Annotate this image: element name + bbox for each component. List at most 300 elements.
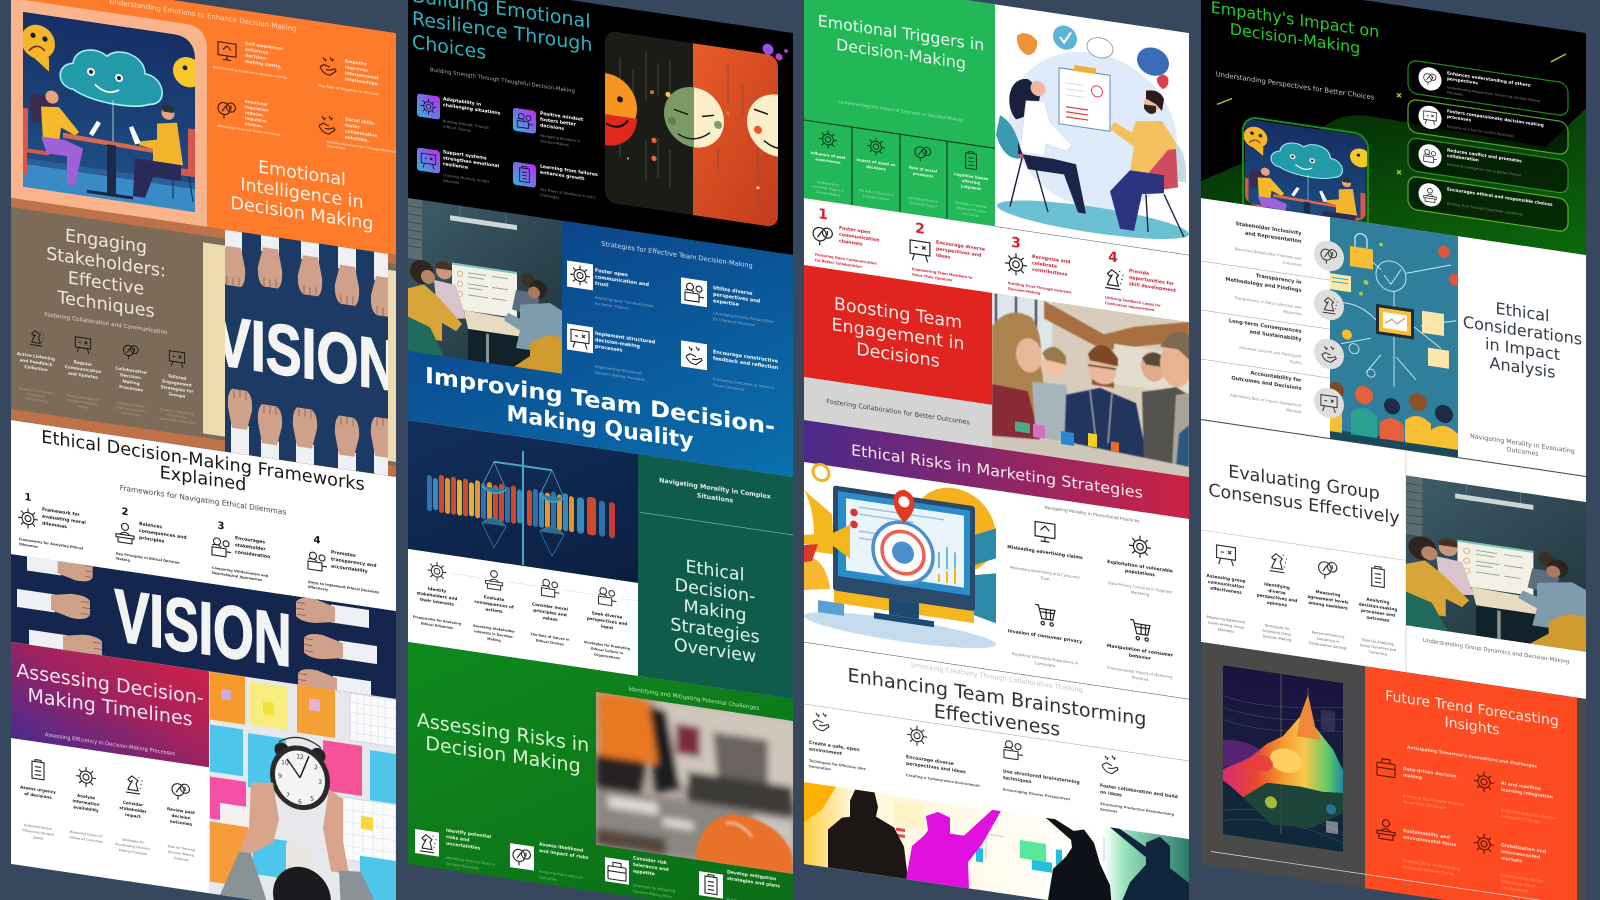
item 4 [1359,564,1397,658]
title: Emotional Triggers in [818,11,984,55]
subtitle: Unlocking Creativity Through Collaborative Thinking [911,661,1083,694]
subtitle: Building Strength Through Thoughtful Decision-Making [430,67,575,95]
item 1: Trust [1040,576,1050,581]
central man with glasses [1088,348,1116,388]
item 1: Influencing Decision [22,828,54,837]
item 1: uncertainties [446,841,481,852]
item 4: Platforms for [167,413,187,420]
subtitle: Fostering Collaboration for Better Outcomes [826,397,970,427]
title: Ethical [1496,299,1549,326]
row 4: Methods [1286,408,1302,414]
row 1: Stakeholder Inclusivity [1236,221,1302,237]
item 2: Voice Their Opinions [912,273,952,282]
item 4: Steps to Implement Ethical Decisions [308,580,379,594]
item 2: Utilize diverse [713,285,753,297]
gradient title band [804,420,1189,519]
card 2 [1408,99,1568,155]
item 4: 4 [314,535,320,547]
item 1: Influence of past [810,151,846,160]
subtitle: Situations [697,492,733,505]
slide: Empathy's Impact on Decision-Making [1201,0,1586,277]
gradient title panel [11,642,209,767]
slide: Boosting Team Engagement in Decisions [804,198,1196,478]
item 3: pressures [913,172,934,179]
item 3: Recognize and [1032,254,1071,265]
subtitle: Navigating Morality in Complex [659,477,771,501]
title: Improving Team Decision- [425,363,775,440]
subtitle: Understanding Group Dynamics and Decision-Making [1423,638,1569,665]
item 3: Support systems [443,149,487,162]
item 4: Decision-Making [168,850,194,858]
item 3: Encourages [235,535,265,546]
item: emotional regulation: impulsive [245,115,267,124]
item 1: Members [1218,628,1234,634]
card 1: Processes [1447,90,1463,97]
item 2: Techniques for [1263,623,1290,631]
item 2 [1107,531,1173,601]
column 1 of slides [11,0,398,900]
item 3: principles and [533,608,567,617]
item 4: Creating Collaborative [160,407,194,416]
item 2: Analyzing Risk Impact on [539,869,583,880]
slide: Building Emotional Resilience [408,0,809,257]
item 4: Continuous Improvement [1105,301,1155,312]
item 1 [417,92,501,137]
item: emotional regulation: Managing Stress for Better Decisions [218,124,281,137]
photo: clock and sticky notes: 12 [296,753,304,761]
framed illustration [1243,116,1368,235]
item 2: opinions [1267,600,1288,608]
item 3: Measuring [1316,589,1340,598]
illustration: people under a smiling cloud [21,11,203,213]
photo: blurred workshop with orange vest [596,690,798,875]
slide: Enhancing Team Brainstorming Effectiveness [804,642,1189,900]
item 4: Future Decisions [713,383,744,392]
row 3: Informed Consent and Participant [1239,346,1302,359]
title: Decision Making [231,194,373,235]
item 2: Balances [139,521,162,530]
title: Insights [1444,715,1500,739]
item 1: challenging situations [443,102,501,117]
title: Making Quality [506,401,694,454]
item 3: Sustainability and [1403,828,1450,841]
item 4: Environmental Impact of Marketing [1107,666,1173,680]
item 1 [1007,517,1083,586]
title: Strategies [670,615,760,648]
item 3: Consensus in [1316,637,1340,644]
item 4: perspectives and [587,615,627,626]
item 1: Adaptability in [443,96,481,108]
item 4 [160,349,195,425]
item 2 [856,135,896,203]
item 2: Predictive Analytics: Tools for [1501,807,1557,821]
item 2 [65,335,101,412]
slide: Future Trend Forecasting Insights [1201,642,1586,900]
item 2 [906,724,980,788]
item 3 [908,145,938,209]
item 2: Leveraging Diverse Perspectives [713,311,773,324]
item 1: stakeholders and [417,590,457,601]
item 3: Consider risk [633,855,668,866]
item: social skills: Building Relationships Through Emotional [327,140,398,154]
photo: people at a colorful whiteboard [804,778,1189,900]
item 4: Ethical Culture in [591,647,624,655]
item 1: making [1403,772,1422,781]
item 2: Positive mindset [540,111,584,123]
item 2: availability [73,804,99,813]
item 1: Techniques for Effective Idea [809,759,866,771]
item 3: among members [1308,600,1348,611]
item 2: Diverse Stakeholder [68,398,99,407]
item 2: Encourage diverse [906,754,954,767]
item 1 [1207,543,1246,636]
item 2: and Updates [68,370,98,380]
item 1 [415,823,495,873]
item 1 [413,558,462,631]
row 3 [1229,318,1344,372]
item 3 [1377,819,1461,877]
item 3: Making Processes [119,848,147,856]
item 4: Promotes [331,549,356,559]
item 3: The Role of Values in [531,632,570,642]
title: Choices [412,30,486,64]
item 4: Evaluating Outcomes to Improve [713,377,775,390]
item 3: agreement levels [1307,594,1349,605]
item 2: perspectives and [936,246,981,259]
item 4: Emotional Influence [956,206,986,214]
item 1: their interests [420,597,454,607]
item 4: skill development [1129,281,1177,294]
item: social skills: Social skills [345,116,374,127]
title: Boosting Team [834,295,962,333]
item: social skills: solutions. [345,134,370,144]
item 1: 1 [818,206,828,224]
item 3: Invasion of consumer privacy [1008,628,1082,645]
item 3: appetite [633,868,655,878]
title: Ethical [685,557,745,586]
card 3: Reduces conflict and promotes [1447,147,1522,165]
item 1: Frameworks for Analyzing Ethical [19,537,83,551]
row 3: Long-term Consequences [1229,318,1302,335]
item 2 [70,765,103,844]
photo: clock and sticky notes: 6 [298,799,302,806]
item 2: and impact of risks [539,848,589,861]
item: empathy [318,54,379,97]
photo: VISION banner with hands [11,549,396,706]
item: self-awareness: decision- [245,53,267,62]
item 4: The Power of Resilience in Life's [539,187,596,200]
item 1: Foster open [595,268,628,279]
item: self-awareness: Understanding Emotions in Decision-Making [213,65,287,80]
item 1: Levels Among Group [1208,621,1245,630]
item 1 [20,757,56,843]
item 4: Tools for Analyzing [1361,638,1394,647]
item: self-awareness: enhances [245,47,269,56]
item 4: decision [171,813,191,821]
row 4: Accountability for [1250,370,1302,384]
item 3: Identifying Personal [908,195,938,204]
item 1: communication [1208,579,1244,589]
item 1: Identifying Potential Risks in [446,856,495,867]
title: Making [684,597,746,626]
silhouette: woman [1048,824,1112,900]
man [1144,94,1160,113]
item 1: Create a safe, open [809,740,859,753]
item 1: evaluating moral [42,514,86,526]
title: Considerations [1463,312,1582,349]
item 4: enhances growth [540,170,585,182]
item 4 [307,536,379,594]
item 2: populations [1125,568,1155,578]
item 1: Collection [24,364,48,372]
item 3: stakeholder [119,805,148,814]
photo: clock and sticky notes: 5 [310,795,314,803]
item 4 [1105,249,1177,316]
title: Decisions [856,340,940,372]
title: Ethical Risks in Marketing Strategies [851,441,1143,502]
item 1: Fostering Open Communication [595,296,654,308]
item 3: Making [122,379,140,386]
item 3: Building Trust Through Inclusive [1008,281,1072,295]
item 3: tolerance and [633,862,669,873]
photo: clock and sticky notes: 2 [314,764,318,771]
photo: clock and sticky notes: 3 [318,778,322,786]
slide: Improving Team Decision-Making Quality [404,197,793,477]
item 3: Ethical Choices [536,638,564,647]
item: emotional regulation: reduces [245,110,263,118]
item 4: Analyzing [1366,597,1390,605]
item 3 [1005,234,1072,300]
item 1: Transparent [26,392,46,399]
item 3 [567,324,656,384]
item 1: Misleading Advertising and Consumer [1010,566,1080,580]
item 4 [1107,616,1174,686]
row 2 [1225,269,1344,323]
item 4: Review past [167,806,195,815]
column 4 of slides [1201,0,1586,900]
item 1: Framework for [42,507,80,518]
slide: Ethical Decision-Making Strategies Overview [408,420,793,699]
row 1: Balancing Stakeholder Interests and [1235,247,1302,261]
item 2 [910,220,985,287]
subtitle: Fostering Collaboration and Communication [44,312,168,336]
subtitle: Understanding the Impact of Emotions on Decision-Making [839,99,963,123]
item 1: Misleading advertising claims [1007,544,1083,561]
item 4: Challenges [540,193,559,200]
item 4: Strategies for [161,384,194,394]
item 1: Building Strength Through [443,119,489,130]
item 4: Engagement [162,378,192,388]
item 2 [510,837,589,887]
item 4: interconnected [1501,849,1540,861]
item 2: decisions [866,165,887,172]
item: empathy: improves [345,64,368,74]
item 1: Measuring Agreement [1207,615,1246,625]
item 1: Generation [809,764,831,772]
item 3: Consider [123,800,144,808]
subtitle: Assessing Efficiency in Decision-Making Processes [45,732,175,757]
item 2: information [72,798,100,807]
item 4: strategies and plans [727,876,780,890]
item 3: resilience [443,161,468,171]
item 1: Emerging Technologies Shaping [1403,793,1464,807]
item: empathy: relationships. [345,76,379,87]
row 2: Transparency in [1256,273,1302,286]
slide: Ethical Risks in Marketing Strategies [804,420,1189,699]
title: Emotional [258,158,346,191]
illustration: monitor with target [804,462,996,655]
card 2: processes [1447,114,1472,124]
item 1 [1377,758,1464,813]
row 4: Outcomes and Decisions [1231,376,1302,392]
item 1: for Better Choices [595,302,628,311]
illustration: people under cloud (small) [1244,118,1371,246]
item 1: of decisions [24,791,52,800]
item: self-awareness: making clarity. [245,59,282,70]
item 3: Decision-Making Processes [595,371,645,382]
item 2: Everyday Choices [863,194,890,202]
item: emotional regulation: choices. [245,121,264,129]
slide: Assessing Risks in Decision Making [408,642,798,900]
item: social skills: collaborative [345,128,377,139]
row 3: and Sustainability [1249,329,1302,343]
item 4 [699,865,780,900]
illustration: scale of justice and people [408,420,638,583]
item 1: Foster open [839,225,871,236]
item 4: Tools for Tracking [166,844,195,852]
illustration: network over audience [1328,217,1461,458]
item 4: behavior [1129,653,1152,662]
title: in Impact [1485,334,1560,364]
item 2: Empowering Team Members to [912,267,973,280]
row 2: Methodology and Findings [1225,277,1302,294]
card 4: Building Trust Through Empathetic Leadership [1447,201,1523,217]
item 2: principles [139,535,165,545]
item 2: Regular [74,359,93,367]
item 2: Assessing Group [1263,629,1292,637]
item 2: Marketing [1131,590,1150,597]
item 2: Making [116,557,130,563]
item 2: Navigating Emotions in [540,134,580,144]
silhouette: magenta person [906,795,1002,893]
item 2 [513,107,584,150]
item 4: Provide [1129,268,1149,277]
item 1: Active Listening [17,351,55,362]
title: Consensus Effectively [1208,481,1400,529]
item 4: Cognitive biases [954,172,989,181]
item 3: decision-making [595,337,641,350]
item 2: Identifying [1264,581,1290,590]
decorative dashes and crosses [1217,2,1566,199]
card 1: Understanding Perspectives: Enhancing Decision-Making [1447,85,1540,103]
item 4: Structuring Productive Brainstorming [1100,802,1175,817]
item 1: Fostering Open Communication [815,253,877,266]
column 2 of slides [404,0,809,900]
item 1: Building Trust Through [19,386,53,395]
photo: team around a table [992,293,1196,478]
item 4: Utilizing Feedback Loops for [1105,296,1161,308]
item 4 [513,160,598,206]
item 1: Difficult Choices [443,125,471,133]
item 1: Identify [428,586,446,594]
item 4: Timelines [172,856,189,862]
item 4: Stakeholder Interaction [160,416,195,425]
item 4: transparency and [331,556,377,569]
item 3: consideration [235,549,270,560]
item: empathy: The Role of Empathy in Choices [318,83,378,96]
title: Decision-Making [836,35,966,73]
item 3: Emotional Triggers [909,201,937,209]
woman with long hair [992,309,1044,434]
item 3: Encouraging Diverse Perspectives [1003,787,1070,801]
item 3: stakeholder [235,542,266,553]
red title panel [804,265,992,405]
item 3: Collaborative Settings [1309,641,1347,651]
item 2: 2 [122,506,128,518]
woman [1009,76,1040,123]
card 1: Enhances understanding of others' [1447,70,1532,89]
item 1: 1 [25,492,31,504]
item: social skills [318,116,396,153]
item 2: The Role of Emotions in [857,188,894,197]
slide: Ethical Decision-Making Frameworks [11,420,396,706]
item: social skills: foster [345,122,361,131]
item 4 [166,781,195,863]
item 1 [17,328,55,405]
item 1: Speed [33,835,43,841]
card 3: collaboration [1447,153,1479,164]
row 2: Reporting [1284,310,1302,316]
silhouette: man in dark shirt [828,784,908,879]
item 2: Key Principles in Ethical Decision- [116,552,181,565]
title: Assessing Decision- [16,659,204,709]
item 1: trust [595,281,609,289]
item 1: risks and [446,834,470,844]
item 4: Practices [1132,676,1148,682]
item 4: Strategies to Manage [955,200,987,209]
column 3 of slides [804,0,1196,900]
item 3 [212,520,270,583]
slide: Assessing Decision-Making Timelines [11,642,396,900]
item 3: Processes [119,384,143,393]
photo: VISION with fists: VISION [215,301,397,407]
item 4: processes and [1361,608,1395,618]
item 2: Decision-Making [540,139,569,147]
item 4: outcomes [170,819,193,827]
item 4: Strategies for Promoting [584,640,631,651]
item 3: Improvement [121,410,142,418]
slide: Emotional Triggers in Decision-Making [804,0,1189,255]
item 2 [1257,551,1297,643]
item 2: Decision-Making [1263,634,1291,642]
item 3: Use structured brainstorming [1003,768,1080,786]
slide: Emotional Intelligence in Decision Making [11,0,398,255]
item 2: AI and machine [1501,780,1541,792]
item 2: consequences of [474,599,514,610]
title: Analysis [1490,353,1555,382]
item 1 [810,128,846,198]
row 3: Rights [1290,360,1302,365]
photo: VISION banner with hands: VISION [114,574,291,682]
item 2: Groups [78,404,89,410]
item 3: environmental focus [1403,834,1456,848]
item: emotional regulation [217,100,280,136]
item 2: learning integration [1501,787,1553,801]
row 1: and Representation [1245,231,1302,245]
item 3: strengthen emotional [443,155,500,170]
item 2: Creating a Collaborative Environment [906,773,980,788]
item 2: Making [487,637,501,643]
